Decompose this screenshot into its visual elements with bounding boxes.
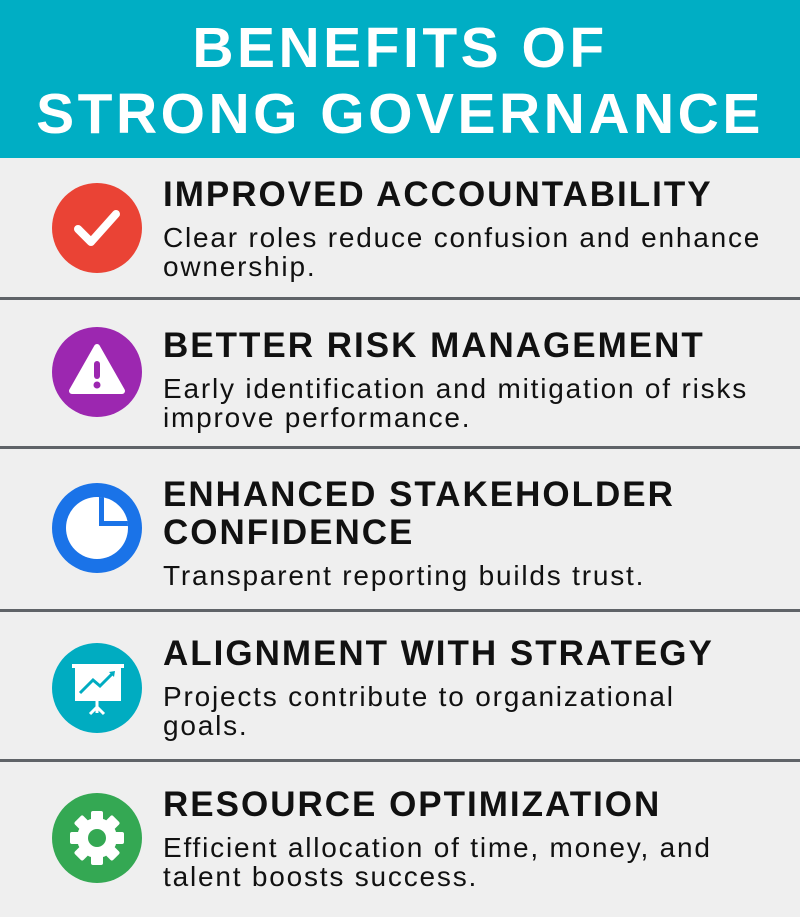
icon: warning — [52, 327, 142, 417]
icon: gear — [52, 793, 142, 883]
panel: strategy: Projects contribute to organizational — [163, 681, 675, 712]
panel: resource: Efficient allocation of time, money, and — [163, 832, 712, 863]
title — [0, 0, 800, 158]
panel: risk: Early identification and mitigation of risks — [163, 373, 748, 404]
panel: risk — [163, 326, 748, 433]
panel: strategy: ALIGNMENT WITH STRATEGY — [163, 634, 714, 673]
panel: strategy: goals. — [163, 710, 249, 741]
title: STRONG GOVERNANCE — [36, 82, 764, 146]
icon: pie chart — [52, 483, 142, 573]
panel: stakeholder: CONFIDENCE — [163, 513, 414, 552]
title: BENEFITS OF — [192, 16, 608, 80]
panel: accountability: Clear roles reduce confusion and enhance — [163, 222, 761, 253]
panel: stakeholder — [163, 475, 675, 591]
panel: strategy — [163, 634, 714, 741]
icon: check — [52, 183, 142, 273]
panel: resource: RESOURCE OPTIMIZATION — [163, 785, 661, 824]
panel: resource: talent boosts success. — [163, 861, 478, 892]
panel: risk: BETTER RISK MANAGEMENT — [163, 326, 705, 365]
panel: accountability — [163, 175, 761, 282]
panel: accountability: IMPROVED ACCOUNTABILITY — [163, 175, 713, 214]
panel: risk: improve performance. — [163, 402, 471, 433]
panel: stakeholder: ENHANCED STAKEHOLDER — [163, 475, 675, 514]
panel: accountability: ownership. — [163, 251, 316, 282]
panel: resource — [163, 785, 712, 892]
panel: stakeholder: Transparent reporting builds trust. — [163, 560, 645, 591]
icon: presentation — [52, 643, 142, 733]
